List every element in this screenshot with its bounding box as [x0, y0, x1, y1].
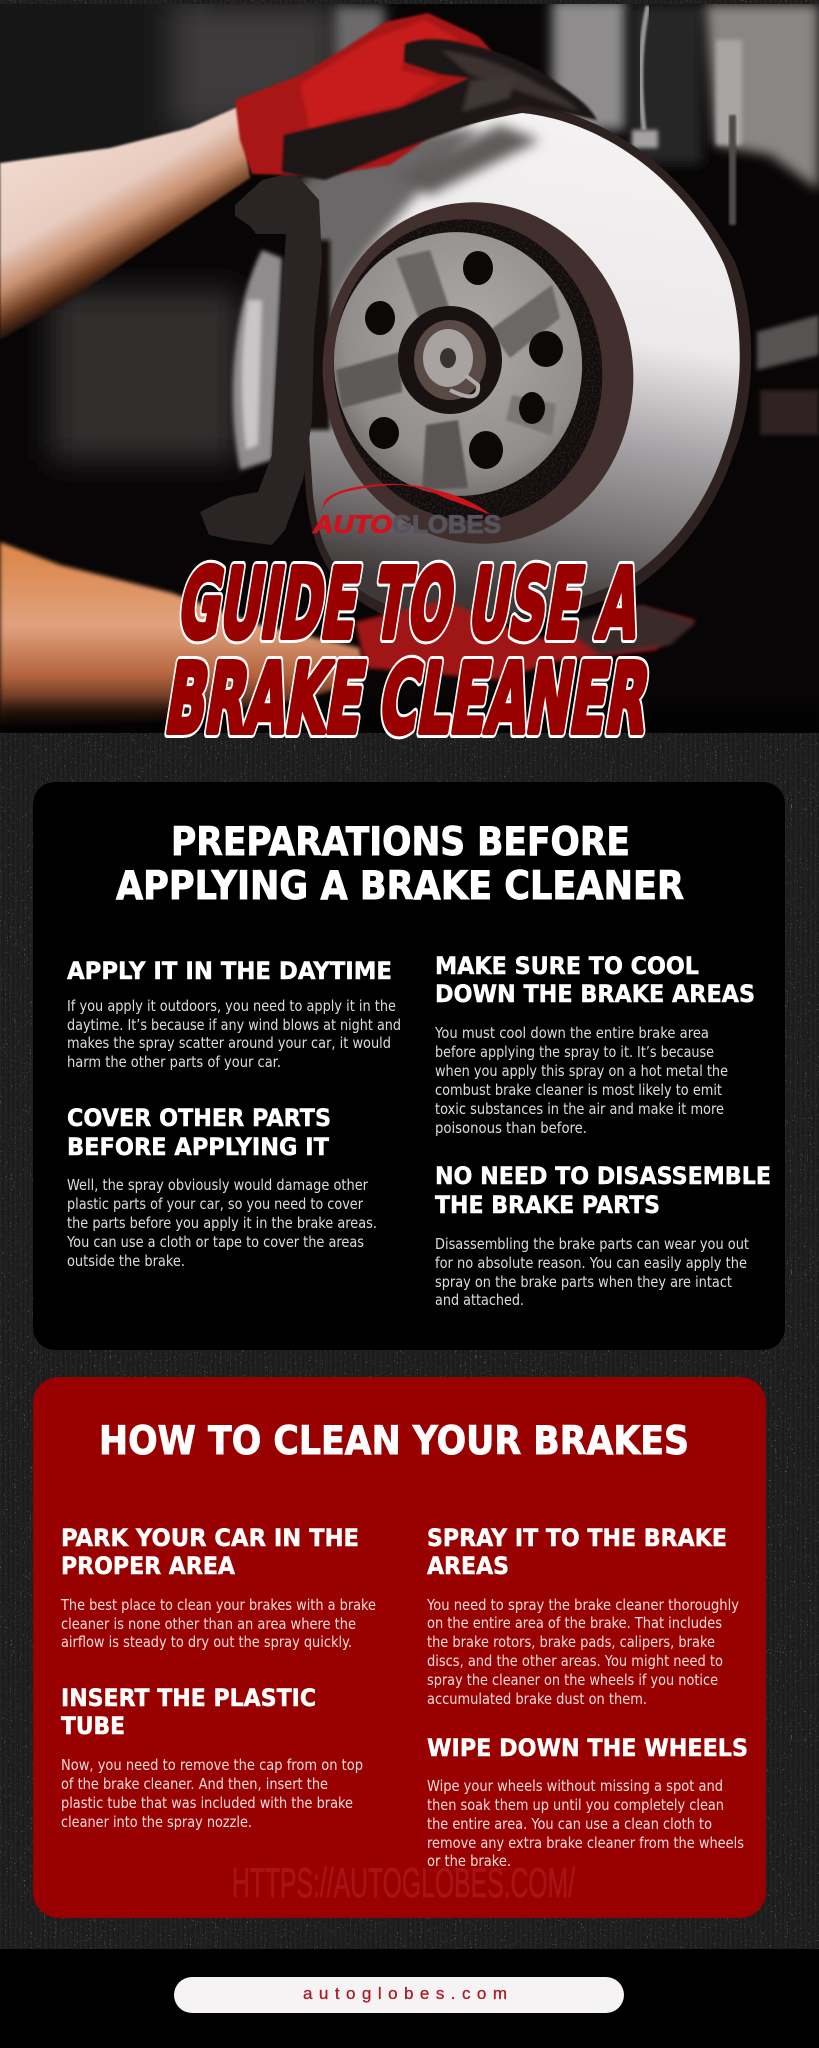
footer website text: autoglobes.com [303, 1984, 507, 2003]
block: insert the plastic tube: cleaner into the spray nozzle. [61, 1813, 252, 1831]
forearm [0, 106, 250, 340]
block: cool down the brake areas: poisonous than before. [435, 1119, 587, 1137]
footer band [0, 1949, 819, 2048]
block: cover other parts: the parts before you apply it in the brake areas. [67, 1214, 377, 1232]
block: cool down the brake areas: before applying the spray to it. It’s because [435, 1043, 714, 1061]
upper glove red [235, 13, 500, 176]
block: park your car [60, 1524, 376, 1651]
block: no need to disassemble [435, 1162, 771, 1309]
block: wipe down the wheels: then soak them up until you completely clean [427, 1796, 724, 1814]
block: park your car: cleaner is none other than an area where the [61, 1615, 356, 1633]
block: insert the plastic tube [61, 1684, 363, 1831]
block: wipe down the wheels [427, 1734, 748, 1870]
block: no need to disassemble: and attached. [435, 1291, 524, 1309]
panel heading: preparations [116, 820, 684, 909]
block: apply it in the daytime: daytime. It’s because if any wind blows at night and [67, 1016, 401, 1034]
block: spray it to the brake areas: You need to spray the brake cleaner thoroughly [426, 1596, 739, 1614]
block: no need to disassemble: spray on the brake parts when they are intact [435, 1273, 732, 1291]
block: no need to disassemble: Disassembling the brake parts can wear you out [435, 1235, 749, 1253]
block: apply it in the daytime: APPLY IT IN THE DAYTIME [67, 957, 392, 985]
workshop background [0, 0, 819, 460]
block: apply it in the daytime [67, 957, 401, 1071]
block: insert the plastic tube: of the brake cleaner. And then, insert the [61, 1775, 328, 1793]
rotor disc [290, 103, 751, 628]
block: no need to disassemble: NO NEED TO DISASSEMBLE [435, 1162, 771, 1190]
lower hand [0, 542, 364, 726]
block: park your car: airflow is steady to dry out the spray quickly. [61, 1633, 352, 1651]
block: wipe down the wheels: or the brake. [427, 1852, 511, 1870]
block: cool down the brake areas: You must cool down the entire brake area [434, 1024, 709, 1042]
block: spray it to the brake areas [426, 1524, 739, 1708]
right bracket [757, 315, 819, 370]
block: park your car: PROPER AREA [61, 1552, 235, 1580]
block: spray it to the brake areas: the brake rotors, brake pads, calipers, brake [427, 1633, 715, 1651]
block: apply it in the daytime: harm the other parts of your car. [67, 1053, 281, 1071]
hero photo: brake disc held by gloved hands [0, 0, 819, 738]
block: cover other parts: COVER OTHER PARTS [67, 1104, 331, 1132]
footer pill button [174, 1977, 624, 2013]
block: cover other parts: plastic parts of your car, so you need to cover [67, 1195, 364, 1213]
block: cover other parts: You can use a cloth or tape to cover the areas [66, 1233, 364, 1251]
block: cover other parts: outside the brake. [67, 1252, 185, 1270]
block: spray it to the brake areas: discs, and the other areas. You might need to [427, 1652, 723, 1670]
watermark url: HTTPS://AUTOGLOBES.COM/ [232, 1859, 575, 1906]
block: wipe down the wheels: WIPE DOWN THE WHEELS [427, 1734, 748, 1762]
block: cool down the brake areas [434, 952, 755, 1137]
panel: preparations before applying [33, 782, 785, 1350]
block: spray it to the brake areas: spray the cleaner on the wheels if you notice [427, 1671, 718, 1689]
panel heading: preparations: PREPARATIONS BEFORE [171, 820, 630, 865]
block: cool down the brake areas: toxic substances in the air and make it more [435, 1100, 724, 1118]
block: cover other parts [66, 1104, 377, 1270]
disc sliver behind pad [233, 250, 282, 470]
block: wipe down the wheels: Wipe your wheels without missing a spot and [427, 1777, 723, 1795]
block: insert the plastic tube: INSERT THE PLASTIC [61, 1684, 316, 1712]
block: cool down the brake areas: MAKE SURE TO COOL [435, 952, 699, 980]
block: insert the plastic tube: plastic tube that was included with the brake [61, 1794, 353, 1812]
block: spray it to the brake areas: accumulated brake dust on them. [427, 1690, 647, 1708]
upper glove dark palm and thumb [282, 39, 597, 180]
block: no need to disassemble: for no absolute reason. You can easily apply the [435, 1254, 747, 1272]
brake pad [200, 172, 322, 545]
panel heading: how to clean: HOW TO CLEAN YOUR BRAKES [99, 1419, 689, 1464]
block: wipe down the wheels: the entire area. You can use a clean cloth to [427, 1815, 712, 1833]
block: insert the plastic tube: TUBE [61, 1712, 125, 1740]
hub plate with bolt holes [334, 232, 582, 496]
block: cover other parts: BEFORE APPLYING IT [67, 1133, 330, 1161]
block: cool down the brake areas: combust brake cleaner is most likely to emit [435, 1081, 722, 1099]
block: park your car: The best place to clean your brakes with a brake [60, 1596, 376, 1614]
block: apply it in the daytime: makes the spray scatter around your car, it would [67, 1034, 391, 1052]
block: spray it to the brake areas: SPRAY IT TO THE BRAKE [427, 1524, 727, 1552]
block: apply it in the daytime: If you apply it outdoors, you need to apply it in the [67, 997, 396, 1015]
lower vignette [0, 699, 289, 726]
block: park your car: PARK YOUR CAR IN THE [61, 1524, 359, 1552]
block: spray it to the brake areas: AREAS [427, 1552, 509, 1580]
panel: how to clean your brakes [33, 1377, 766, 1918]
dark gap between pad and hat [306, 240, 330, 430]
panel heading: preparations: APPLYING A BRAKE CLEANER [116, 864, 684, 909]
block: cool down the brake areas: DOWN THE BRAKE AREAS [435, 980, 755, 1008]
logo: Auto Globes: GLOBES [392, 511, 501, 539]
logo: Auto Globes: AUTO [312, 511, 393, 539]
block: spray it to the brake areas: on the entire area of the brake. That includes [427, 1614, 722, 1632]
block: cool down the brake areas: when you apply this spray on a hot metal the [435, 1062, 728, 1080]
lower glove [355, 600, 695, 680]
title [159, 548, 657, 755]
block: insert the plastic tube: Now, you need to remove the cap from on top [61, 1756, 363, 1774]
block: wipe down the wheels: remove any extra brake cleaner from the wheels [427, 1834, 744, 1852]
centre hub nut [398, 306, 502, 414]
logo: Auto Globes [312, 484, 501, 539]
block: cover other parts: Well, the spray obviously would damage other [67, 1176, 369, 1194]
rotor hat ring [322, 202, 634, 544]
block: no need to disassemble: THE BRAKE PARTS [435, 1191, 660, 1219]
